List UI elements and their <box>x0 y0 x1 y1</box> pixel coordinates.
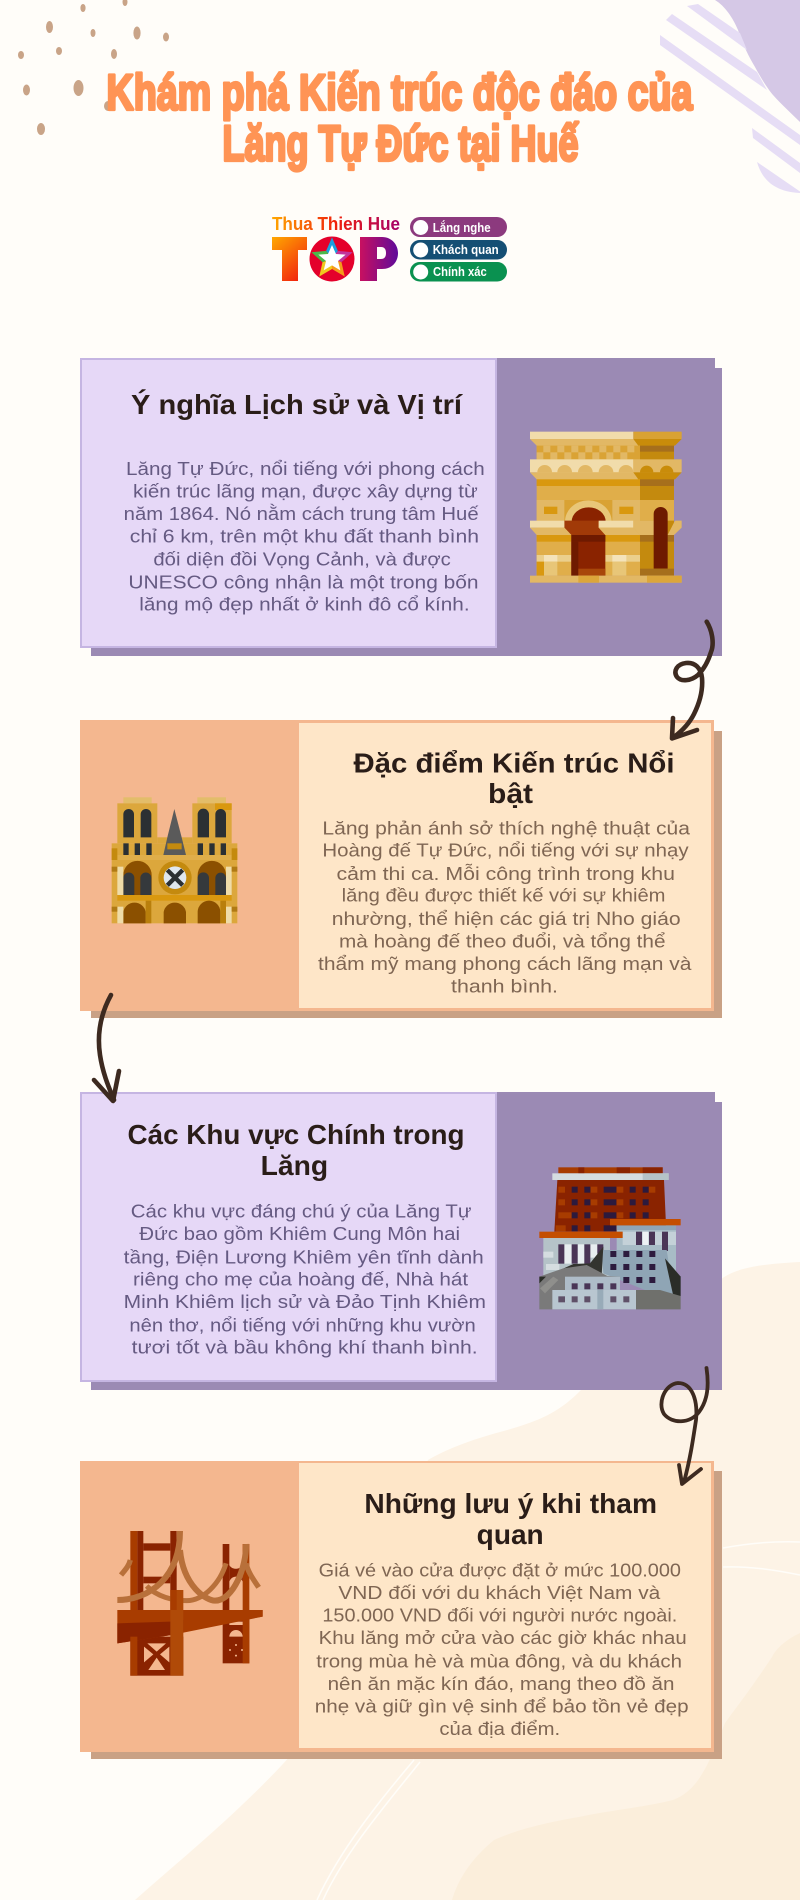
icon: suspension bridge <box>117 1531 263 1676</box>
arrow: panel 2 to panel 3 <box>94 995 119 1101</box>
arrow: panel 3 to panel 4 <box>661 1368 708 1484</box>
text block: main areas description: Các khu vực đáng chú ý của Lăng Tự <box>131 1201 472 1222</box>
text block: main areas description: nên thơ, nổi tiếng với những khu vườn <box>129 1314 476 1335</box>
heading: Các Khu vực Chính trong Lăng: Các Khu vực Chính trong <box>128 1119 464 1150</box>
heading: Ý nghĩa Lịch sử và Vị trí: Ý nghĩa Lịch sử và Vị trí <box>131 389 463 420</box>
text block: main areas description: Đức bao gồm Khiêm Cung Môn hai <box>139 1223 460 1244</box>
text block: architecture description: nhường, thể hiện các giá trị Nho giáo <box>332 908 681 929</box>
heading: Những lưu ý khi tham quan: quan <box>477 1519 544 1550</box>
panel: main areas of the tomb <box>80 1092 722 1390</box>
panel: architectural features <box>80 720 722 1018</box>
background blob: deeper cream <box>452 1633 800 1900</box>
text block: main areas description: riêng cho mẹ của hoàng đế, Nhà hát <box>133 1268 468 1289</box>
text block: visitor information: Khu lăng mở cửa vào các giờ khác nhau <box>319 1627 687 1648</box>
decoration: top-right lavender blob and stripes <box>660 0 800 193</box>
heading: Những lưu ý khi tham quan <box>364 1488 657 1550</box>
logo: Thua Thien Hue TOP: Khách quan <box>433 242 499 257</box>
logo: Thua Thien Hue TOP: Chính xác <box>433 264 487 279</box>
text block: visitor information: nên ăn mặc kín đáo, mang theo đồ ăn <box>328 1673 674 1694</box>
text block: history and location <box>124 458 485 615</box>
heading: Các Khu vực Chính trong Lăng: Lăng <box>261 1150 328 1181</box>
decoration: scattered dots <box>18 0 169 135</box>
title <box>106 64 693 172</box>
text block: visitor information: trong mùa hè và mùa đông, và du khách <box>316 1650 682 1671</box>
text block: visitor information <box>315 1560 689 1739</box>
text block: history and location: kiến trúc lãng mạn, được xây dựng từ <box>133 480 478 502</box>
heading: Đặc điểm Kiến trúc Nổi bật: Đặc điểm Kiến trúc Nổi <box>354 748 674 779</box>
text block: main areas description <box>124 1201 486 1357</box>
background blob: light cream <box>135 1262 800 1900</box>
heading: Các Khu vực Chính trong Lăng <box>128 1119 464 1181</box>
icon: triumphal arch gate <box>530 432 682 583</box>
logo: Thua Thien Hue TOP: Lắng nghe <box>433 220 491 235</box>
panel: visitor notes <box>80 1461 722 1759</box>
text block: architecture description: thẩm mỹ mang phong cách lãng mạn và <box>318 953 692 974</box>
arrow: panel 1 to panel 2 <box>672 622 713 738</box>
text block: history and location: Lăng Tự Đức, nổi tiếng với phong cách <box>126 458 485 479</box>
text block: architecture description: Hoàng đế Tự Đức, nổi tiếng với sự nhạy <box>322 840 689 861</box>
logo: Thua Thien Hue TOP: Thua Thien Hue <box>272 214 400 234</box>
text block: architecture description <box>318 817 692 996</box>
text block: visitor information: VND đối với du khách Việt Nam và <box>338 1582 661 1603</box>
heading: Đặc điểm Kiến trúc Nổi bật <box>354 748 674 809</box>
text block: history and location: chỉ 6 km, trên một khu đất thanh bình <box>130 526 479 546</box>
text block: visitor information: Giá vé vào cửa được đặt ở mức 100.000 <box>319 1560 681 1581</box>
text block: architecture description: mà hoàng đế theo đuổi, và tổng thể <box>339 931 666 952</box>
text block: history and location: lăng mộ đẹp nhất ở kinh đô cổ kính. <box>139 594 470 615</box>
text block: main areas description: tươi tốt và bầu không khí thanh bình. <box>132 1336 478 1357</box>
text block: architecture description: cảm thi ca. Mỗi công trình trong khu <box>336 863 675 884</box>
text block: visitor information: nhẹ và giữ gìn vệ sinh để bảo tồn vẻ đẹp <box>315 1696 689 1717</box>
text block: history and location: UNESCO công nhận là một trong bốn <box>128 571 479 592</box>
panel: historical significance and location <box>80 358 722 656</box>
heading: Đặc điểm Kiến trúc Nổi bật: bật <box>488 778 533 809</box>
text block: visitor information: 150.000 VND đối với người nước ngoài. <box>322 1605 677 1626</box>
title: Lăng Tự Đức tại Huế <box>222 116 579 172</box>
heading: Những lưu ý khi tham quan: Những lưu ý khi tham <box>364 1488 657 1519</box>
text block: architecture description: lăng đều được thiết kế với sự khiêm <box>342 885 666 906</box>
text block: history and location: đối diện đồi Vọng Cảnh, và được <box>153 548 451 570</box>
icon: cathedral facade <box>112 797 237 923</box>
text block: architecture description: Lăng phản ánh sở thích nghệ thuật của <box>322 817 691 838</box>
text block: visitor information: của địa điểm. <box>439 1718 560 1739</box>
text block: architecture description: thanh bình. <box>451 975 558 996</box>
icon: palace on a rock <box>539 1167 681 1309</box>
background white curves <box>317 1542 800 1900</box>
text block: main areas description: tầng, Điện Lương Khiêm yên tĩnh dành <box>124 1246 484 1267</box>
text block: main areas description: Minh Khiêm lịch sử và Đảo Tịnh Khiêm <box>124 1291 486 1312</box>
text block: history and location: năm 1864. Nó nằm cách trung tâm Huế <box>124 503 479 524</box>
logo: Thua Thien Hue TOP <box>272 214 507 282</box>
